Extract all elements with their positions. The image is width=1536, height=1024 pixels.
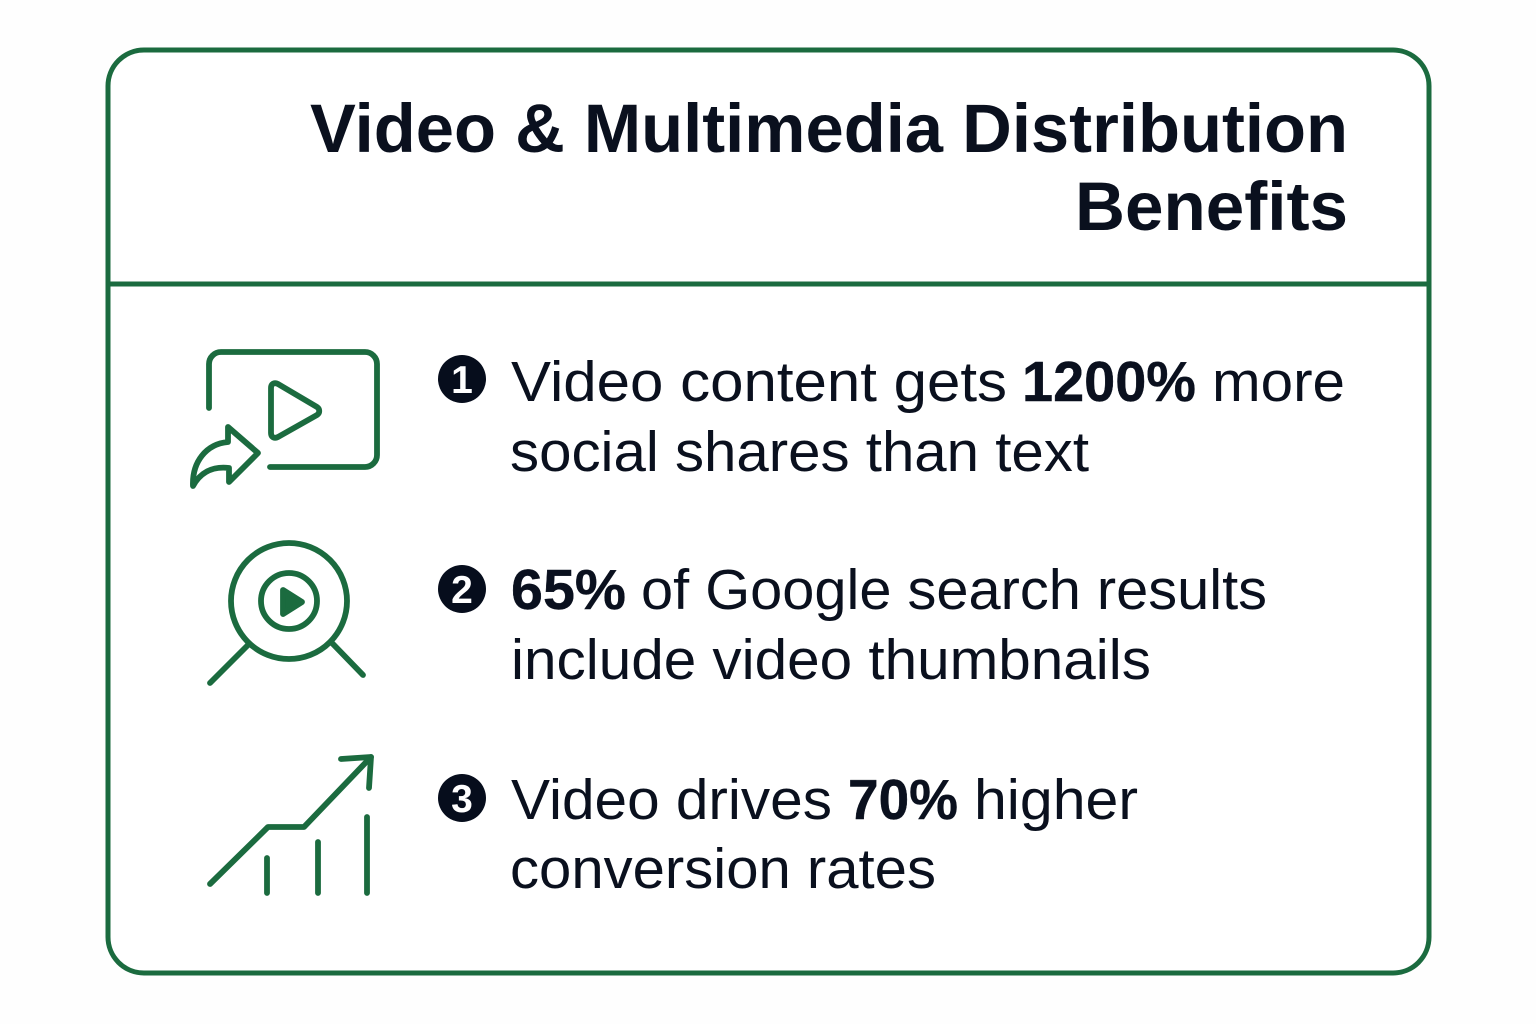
icon: video search — [210, 543, 363, 683]
benefit 3 text: 70% — [848, 768, 958, 832]
benefit 2 text: 65% — [511, 558, 626, 622]
benefit 2 text: include video thumbnails — [511, 628, 1151, 692]
benefit 1 text: 1200% — [1022, 350, 1196, 414]
icon: video share — [193, 352, 377, 486]
benefit 1 text — [510, 350, 1345, 484]
icon: growth chart — [210, 757, 371, 893]
number badge 2: 2 — [451, 569, 473, 612]
benefit 3 — [438, 768, 1138, 901]
benefit 1 text: more — [1212, 350, 1345, 414]
benefit 1 text: Video content gets — [511, 350, 1007, 414]
benefit 2 text — [511, 558, 1267, 692]
benefit 3 text: higher — [974, 768, 1138, 832]
panel: benefits card — [108, 50, 1429, 973]
benefit 3 text: conversion rates — [510, 837, 936, 901]
number badge 1: 1 — [451, 359, 473, 402]
benefit 2 text: of Google search results — [641, 558, 1267, 622]
number badge 3 — [438, 774, 486, 822]
number badge 1 — [438, 355, 486, 403]
number badge 2 — [438, 565, 486, 613]
benefit 1 text: social shares than text — [510, 420, 1089, 484]
number badge 3: 3 — [451, 778, 473, 821]
benefit 3 text: Video drives — [511, 768, 832, 832]
title: Benefits — [1075, 168, 1348, 245]
benefit 1 — [438, 350, 1345, 484]
title — [310, 90, 1348, 245]
benefit 3 text — [510, 768, 1138, 901]
title: Video & Multimedia Distribution — [310, 90, 1348, 167]
benefit 2 — [438, 558, 1267, 692]
